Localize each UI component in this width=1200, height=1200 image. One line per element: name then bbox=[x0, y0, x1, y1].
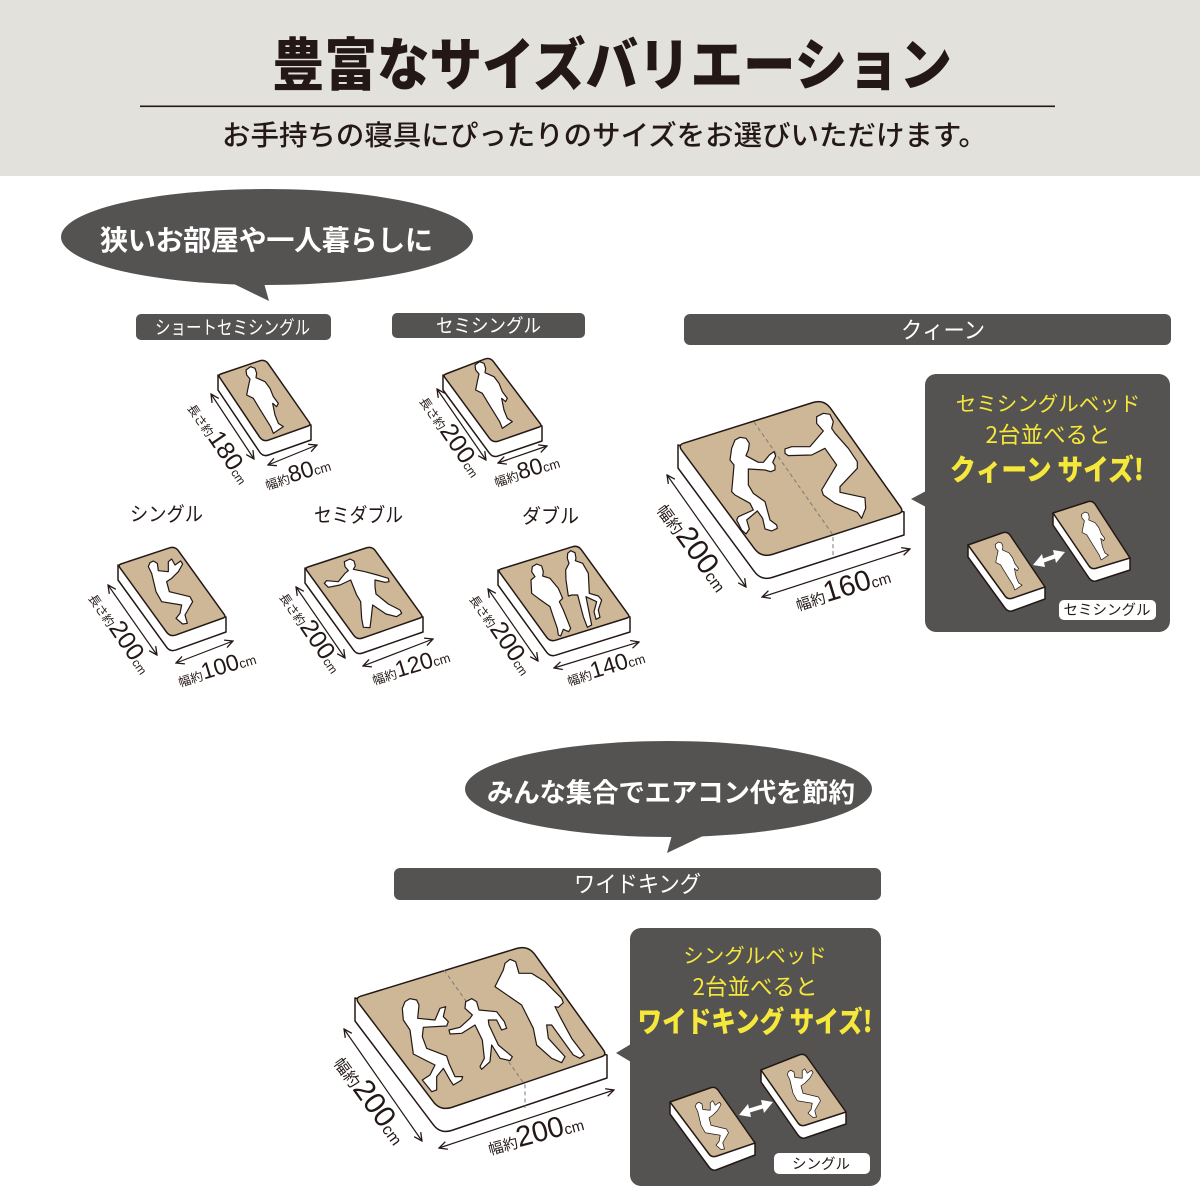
mini bed: right single bbox=[761, 1054, 846, 1138]
title: 豊富なサイズバリエーション bbox=[272, 20, 952, 102]
bed: short semi single: 長さ約180cm bbox=[182, 396, 258, 489]
bed: wide king: 幅約200cm bbox=[327, 1048, 415, 1151]
bed: double: 幅約140cm bbox=[563, 642, 648, 691]
mini bed: left single bbox=[670, 1087, 755, 1170]
bed: queen: 幅約200cm bbox=[650, 495, 738, 598]
header band bbox=[0, 0, 1200, 176]
bed: queen: 幅約160cm bbox=[791, 558, 894, 618]
bed: queen bbox=[650, 402, 910, 618]
label: short semi single: ショートセミシングル bbox=[155, 313, 310, 340]
label: semi single: セミシングル bbox=[436, 311, 541, 338]
arrow: join beds bbox=[1033, 550, 1065, 567]
bed: semi single: 幅約80cm bbox=[490, 447, 562, 492]
bed: short semi single: 幅約80cm bbox=[261, 450, 333, 495]
bed: semi double: 長さ約200cm bbox=[274, 585, 350, 678]
badge: semi single: セミシングル bbox=[1064, 599, 1150, 620]
label: semi single bbox=[392, 311, 585, 338]
speech bubble: small rooms bbox=[61, 189, 473, 301]
bed: semi single: 長さ約200cm bbox=[414, 389, 490, 482]
subtitle: お手持ちの寝具にぴったりのサイズをお選びいただけます。 bbox=[222, 114, 987, 154]
arrow: join beds bbox=[739, 1100, 773, 1117]
bed: single bbox=[83, 547, 259, 692]
label: queen: クィーン bbox=[901, 311, 985, 345]
label: queen bbox=[684, 311, 1171, 345]
callout panel: wide king: シングルベッド bbox=[683, 939, 827, 969]
label: wide king bbox=[394, 865, 881, 900]
label: wide king: ワイドキング bbox=[574, 865, 701, 899]
label: single: シングル bbox=[130, 498, 203, 527]
bed: double bbox=[464, 546, 648, 691]
mini bed: right semi single bbox=[1053, 501, 1130, 581]
callout panel: wide king: 2台並べると bbox=[692, 970, 818, 1002]
bed: wide king: 幅約200cm bbox=[484, 1105, 587, 1162]
mini bed: left semi single bbox=[968, 532, 1045, 611]
callout panel: queen: セミシングルベッド bbox=[956, 387, 1140, 417]
speech bubble: small rooms: 狭いお部屋や一人暮らしに bbox=[100, 219, 433, 259]
label: semi double: セミダブル bbox=[314, 499, 403, 528]
bed: double: 長さ約200cm bbox=[464, 587, 540, 680]
label: double: ダブル bbox=[522, 500, 579, 529]
bed: semi double bbox=[274, 547, 453, 690]
bed: semi single bbox=[414, 359, 562, 492]
callout panel: wide king: ワイドキング サイズ! bbox=[638, 999, 872, 1041]
callout panel: wide king bbox=[616, 928, 881, 1186]
bed: wide king bbox=[327, 948, 614, 1162]
bed: single: 幅約100cm bbox=[174, 643, 259, 692]
callout panel: queen: 2台並べると bbox=[986, 418, 1110, 450]
badge: single bbox=[774, 1153, 870, 1174]
bed: single: 長さ約200cm bbox=[83, 586, 159, 679]
callout panel: queen: クィーン サイズ! bbox=[950, 447, 1144, 489]
speech bubble: save air conditioning bbox=[465, 741, 872, 853]
badge: single: シングル bbox=[792, 1153, 850, 1174]
callout panel: queen bbox=[911, 374, 1170, 632]
bed: short semi single bbox=[182, 360, 333, 495]
bed: semi double: 幅約120cm bbox=[368, 641, 453, 690]
speech bubble: save air conditioning: みんな集合でエアコン代を節約 bbox=[487, 771, 855, 810]
